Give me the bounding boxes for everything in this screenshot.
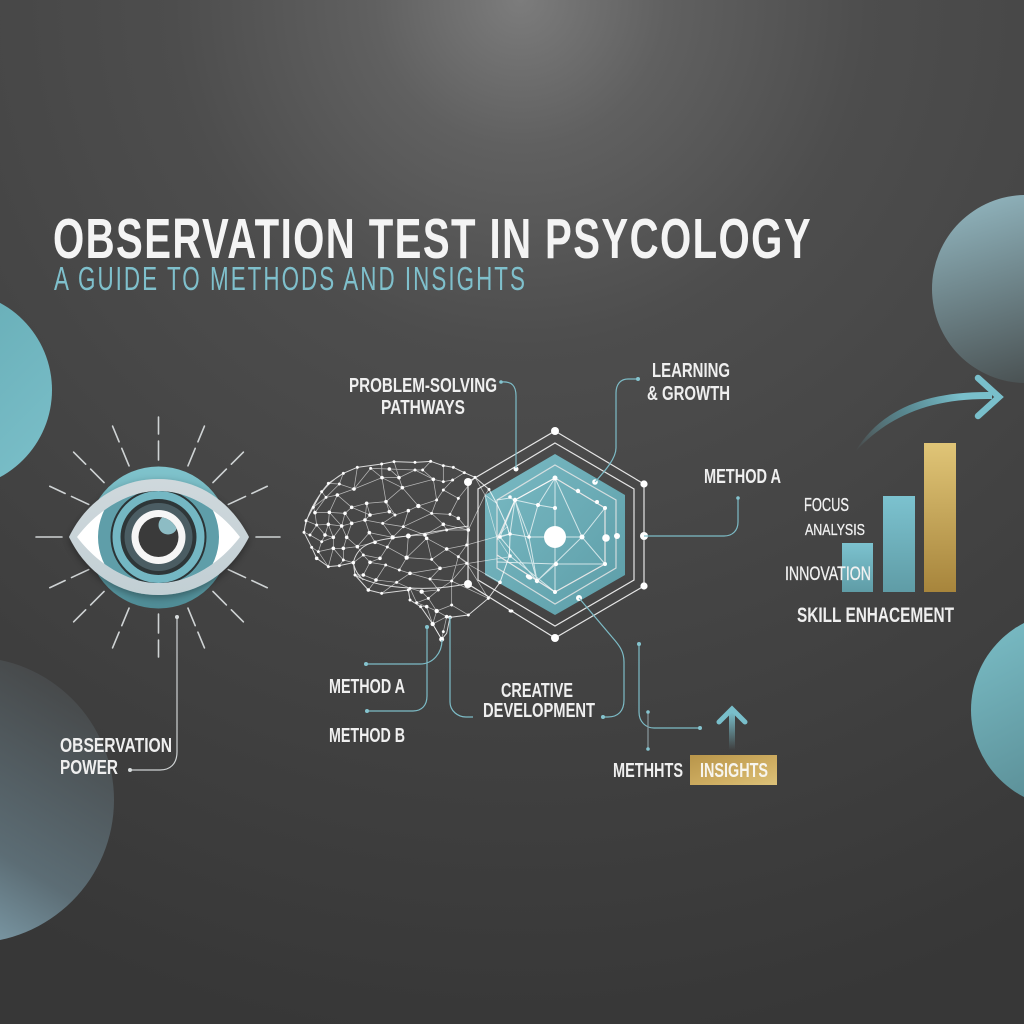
decorative circle: bottom left [0,657,114,943]
methods text: METHHTS [613,760,683,782]
label: problem-solving pathways: PATHWAYS [381,397,465,419]
pupil ring [132,510,186,564]
label: method B: METHOD B [329,725,405,747]
teal hexagon [485,454,625,615]
inner network links [497,478,605,592]
insights badge [690,755,777,785]
label: method A left: METHOD A [329,676,405,698]
label: learning and growth [647,360,730,405]
label: creative development: CREATIVE [501,680,573,702]
subtitle: A GUIDE TO METHODS AND INSIGHTS [54,260,527,297]
brain outline [304,461,510,639]
bar label: innovation: INNOVATION [785,564,871,585]
connector: method A right [644,498,738,536]
pupil highlight [158,518,176,534]
brain network [303,460,510,642]
label: observation power [60,735,172,779]
decorative circle: bottom right [971,612,1024,808]
iris [98,491,219,583]
pupil [138,517,178,557]
insights callout [613,709,777,785]
hexagon nodes [464,427,648,642]
chart caption: SKILL ENHACEMENT [797,604,954,627]
label: observation power: POWER [60,757,118,779]
connector: methods stub [647,712,649,749]
label: observation power: OBSERVATION [60,735,172,757]
connector: method B [367,627,427,711]
eye white [77,491,240,583]
decorative circle: top right [932,195,1024,383]
connector: methods to insights [639,644,700,728]
arrow: growth trend [855,378,999,452]
connector: method A left [366,640,442,664]
eyelid [69,479,249,595]
bar: innovation [842,543,873,592]
bar: analysis [883,496,915,592]
arrow head [978,378,999,416]
eye rays [36,417,280,657]
icon: eye with rays [36,417,280,657]
label: creative development [483,680,595,722]
label: learning and growth: & GROWTH [647,383,730,405]
hexagon network [464,427,648,642]
label: method A right: METHOD A [704,466,781,488]
label: creative development: DEVELOPMENT [483,700,595,722]
connector: problem-solving pathways [501,382,516,468]
bar label: focus: FOCUS [804,495,849,515]
up arrow [719,709,745,750]
connector: learning and growth [595,379,638,482]
label: problem-solving pathways [349,375,497,419]
connector: observation power [130,617,177,770]
connector endpoints [128,377,740,772]
connector: creative development right [579,598,624,717]
outer hexagon frames [468,431,644,638]
bar chart: skill enhancement [785,443,956,627]
decorative circle: top left [0,291,52,489]
label: problem-solving pathways: PROBLEM-SOLVING [349,375,497,397]
label: learning and growth: LEARNING [652,360,730,382]
bar: focus [924,443,956,592]
connector: creative development left [450,617,473,717]
brain links [304,461,510,639]
eye backing disc [88,466,230,608]
brain nodes [303,460,502,642]
bar label: analysis: ANALYSIS [805,522,865,539]
insights text: INSIGHTS [700,760,768,782]
arrow shaft [855,392,992,452]
